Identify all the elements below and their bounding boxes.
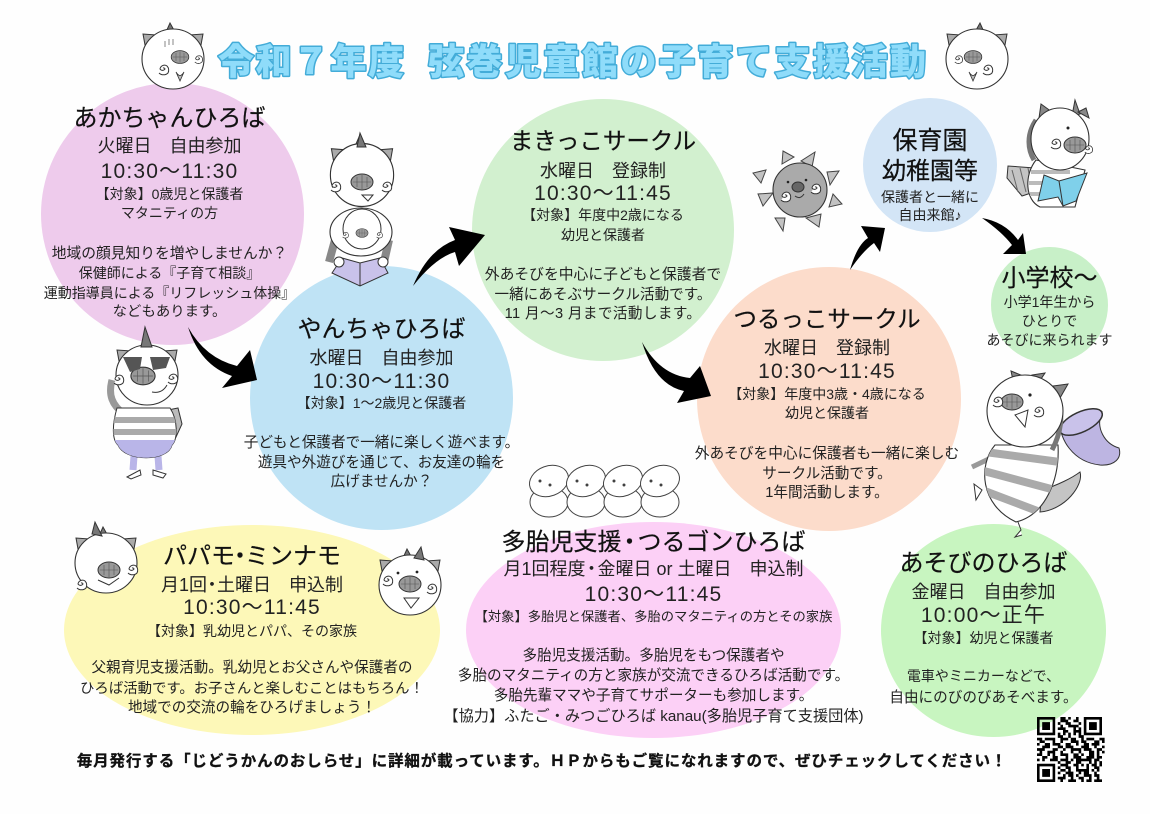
icon: mascot title right — [946, 23, 1008, 89]
schedule: 水曜日 登録制 — [764, 338, 890, 358]
time: 10:00～正午 — [921, 604, 1046, 627]
panel: 小学校～ — [991, 247, 1108, 363]
description line 4: などもあります。 — [113, 304, 226, 320]
heading: つるっこサークル: つるっこサークル — [733, 306, 921, 332]
icon: mascot right of パパモ — [379, 547, 441, 615]
icon: four babies — [525, 460, 684, 517]
heading: パパモ・ミンナモ: パパモ・ミンナモ — [163, 543, 341, 570]
panel: パパモ・ミンナモ — [64, 525, 440, 735]
description line 2: 遊具や外遊びを通じて、お友達の輪を — [258, 455, 505, 471]
description line 3: 地域での交流の輪をひろげましょう！ — [128, 700, 376, 716]
QR code — [1037, 718, 1105, 781]
heading: 幼稚園等: 幼稚園等 — [882, 158, 978, 185]
note line 3: あそびに来られます — [986, 332, 1112, 348]
description line 2: 自由にのびのびあそべます。 — [889, 690, 1078, 706]
time: 10:30～11:30 — [101, 160, 238, 183]
time: 10:30～11:45 — [534, 182, 672, 205]
footer note: 毎月発行する「じどうかんのおしらせ」に詳細が載っています。ＨＰからもご覧になれますので、ぜひチェックしてください！ — [77, 753, 1007, 770]
target audience line 2: マタニティの方 — [121, 205, 218, 221]
target audience line 2: 幼児と保護者 — [785, 405, 869, 421]
schedule: 水曜日 自由参加 — [310, 348, 454, 368]
target audience: 【対象】乳幼児とパパ、その家族 — [147, 623, 357, 639]
description: 外あそびを中心に子どもと保護者で — [485, 267, 721, 283]
time: 10:30～11:45 — [758, 360, 896, 383]
panel: あそびのひろば — [881, 524, 1106, 737]
description line 3: 運動指導員による『リフレッシュ体操』 — [44, 285, 295, 301]
note: 小学1年生から — [1004, 294, 1095, 310]
icon: sun — [753, 151, 842, 231]
description: 父親育児支援活動。乳幼児とお父さんや保護者の — [91, 660, 413, 676]
heading: 多胎児支援・つるゴンひろば: 多胎児支援・つるゴンひろば — [502, 529, 806, 556]
description line 2: ひろば活動です。お子さんと楽しむことはもちろん！ — [80, 681, 424, 697]
schedule: 水曜日 登録制 — [540, 161, 666, 181]
schedule: 金曜日 自由参加 — [912, 582, 1056, 602]
description line 3: 広げませんか？ — [331, 474, 432, 490]
icon: mascots with book — [329, 133, 394, 286]
note line 2: 自由来館♪ — [898, 207, 962, 223]
schedule: 月1回・土曜日 申込制 — [161, 575, 343, 595]
description line 2: 一緒にあそぶサークル活動です。 — [494, 287, 712, 303]
panel: 多胎児支援・つるゴンひろば — [466, 522, 841, 738]
panel: まきっこサークル — [472, 99, 734, 361]
note: 保護者と一緒に — [881, 189, 979, 205]
heading: あそびのひろば: あそびのひろば — [900, 550, 1068, 577]
target audience: 【対象】幼児と保護者 — [914, 630, 1054, 646]
heading: あかちゃんひろば: あかちゃんひろば — [74, 105, 266, 132]
target audience: 【対象】年度中3歳・4歳になる — [728, 386, 926, 402]
note line 2: ひとりで — [1022, 313, 1077, 329]
time: 10:30～11:45 — [183, 596, 321, 619]
icon: mascot left of パパモ — [75, 522, 138, 593]
time: 10:30～11:45 — [585, 583, 722, 606]
icon: mascot with butterfly net — [972, 371, 1120, 537]
schedule: 月1回程度・金曜日 or 土曜日 申込制 — [503, 559, 804, 579]
target audience line 2: 幼児と保護者 — [561, 227, 645, 243]
heading: 保育園: 保育園 — [892, 127, 968, 155]
description: 外あそびを中心に保護者も一緒に楽しむ — [695, 446, 959, 462]
heading: 小学校～: 小学校～ — [1002, 265, 1098, 292]
target audience: 【対象】1～2歳児と保護者 — [297, 395, 466, 411]
description line 3: 1年間活動します。 — [765, 485, 889, 501]
target audience: 【対象】多胎児と保護者、多胎のマタニティの方とその家族 — [475, 609, 832, 624]
target audience: 【対象】0歳児と保護者 — [96, 186, 243, 202]
target audience: 【対象】年度中2歳になる — [522, 207, 684, 223]
arrow: あかちゃんひろば to やんちゃひろば — [188, 327, 257, 388]
panel: 保育園・幼稚園等 — [863, 98, 997, 232]
panel: あかちゃんひろば — [41, 83, 304, 345]
heading: やんちゃひろば: やんちゃひろば — [298, 316, 466, 343]
arrow: つるっこサークル to 保育園 — [850, 226, 885, 270]
description: 多胎児支援活動。多胎児をもつ保護者や — [522, 648, 785, 664]
title: 令和７年度 — [218, 41, 404, 82]
description: 地域の顔見知りを増やしませんか？ — [52, 246, 287, 262]
description line 3: 多胎先輩ママや子育てサポーターも参加します。 — [494, 688, 813, 704]
title: 弦巻児童館の子育て支援活動 — [428, 41, 926, 82]
time: 10:30～11:30 — [313, 370, 450, 393]
description line 2: サークル活動です。 — [762, 466, 892, 482]
arrow: やんちゃひろば to まきっこサークル — [413, 227, 485, 286]
description line 2: 多胎のマタニティの方と家族が交流できるひろば活動です。 — [458, 668, 849, 684]
arrow: 保育園 to 小学校 — [982, 218, 1026, 254]
description: 子どもと保護者で一緒に楽しく遊べます。 — [244, 435, 519, 451]
heading: まきっこサークル: まきっこサークル — [510, 128, 696, 154]
description line 2: 保健師による『子育て相談』 — [79, 265, 260, 281]
description: 電車やミニカーなどで、 — [907, 668, 1060, 684]
collaborator: 【協力】ふたご・みつごひろば kanau(多胎児子育て支援団体) — [443, 708, 864, 725]
panel: つるっこサークル — [697, 267, 961, 531]
arrow: まきっこサークル to つるっこサークル — [642, 342, 711, 403]
description line 3: 11 月～3 月まで活動します。 — [505, 306, 701, 322]
icon: mascot with sunglasses — [110, 327, 182, 479]
schedule: 火曜日 自由参加 — [98, 136, 242, 156]
icon: mascot reading blue book — [1007, 100, 1093, 207]
icon: mascot title left — [142, 23, 204, 89]
panel: やんちゃひろば — [250, 266, 513, 530]
